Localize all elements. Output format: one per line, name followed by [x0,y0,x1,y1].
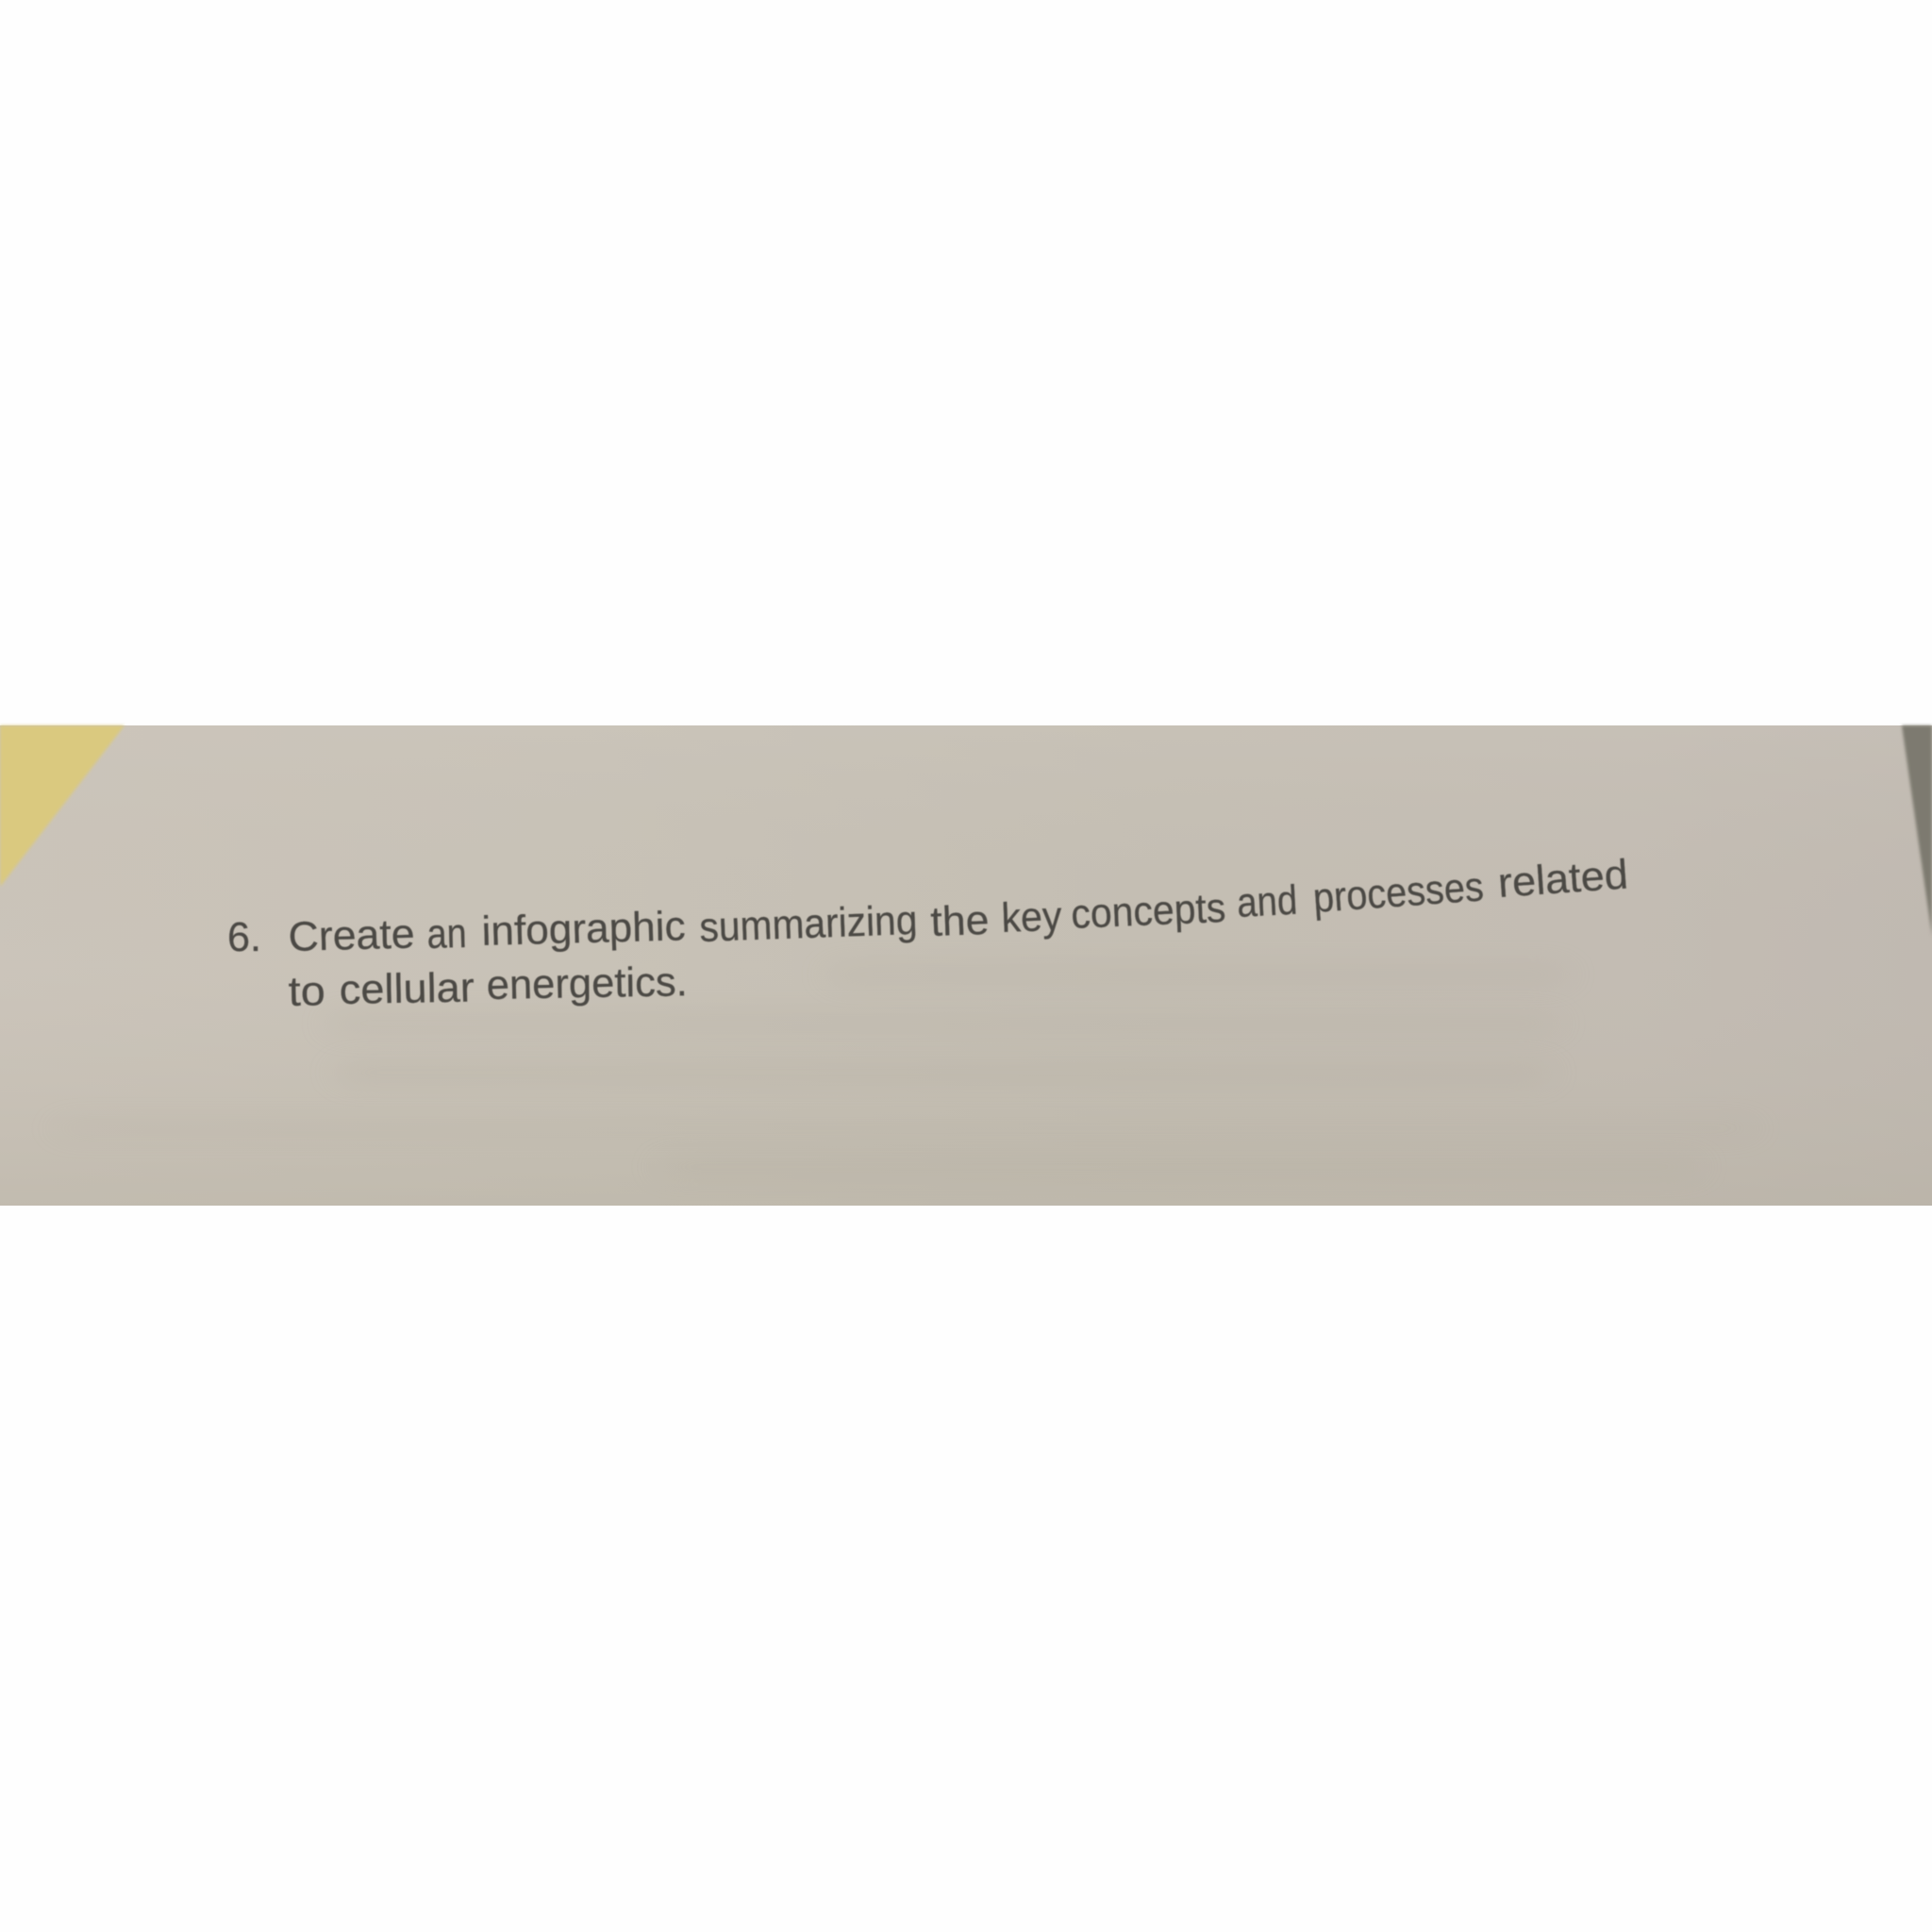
question line 1: concepts [1070,885,1226,938]
question line 1: key [1001,893,1062,941]
question line 1: infographic [481,903,686,955]
question text [227,851,1629,1015]
question line 1: related [1496,851,1629,907]
question line 1: an [426,910,467,958]
question line 2: cellular [339,965,475,1013]
question line 1 [288,851,1629,960]
paper sheet band [0,725,1932,1206]
question line 2: to [288,968,325,1015]
question line 1: and [1236,877,1298,926]
question line 1: the [930,897,990,945]
question line 2 [288,958,688,1015]
question line 1: Create [288,911,415,960]
question line 1: processes [1311,863,1485,922]
yellow sheet corner [0,725,125,887]
dark background at right edge [1902,725,1932,936]
question line 2: energetics. [486,958,688,1008]
question line 1: summarizing [699,897,918,951]
question number: 6. [227,914,261,960]
